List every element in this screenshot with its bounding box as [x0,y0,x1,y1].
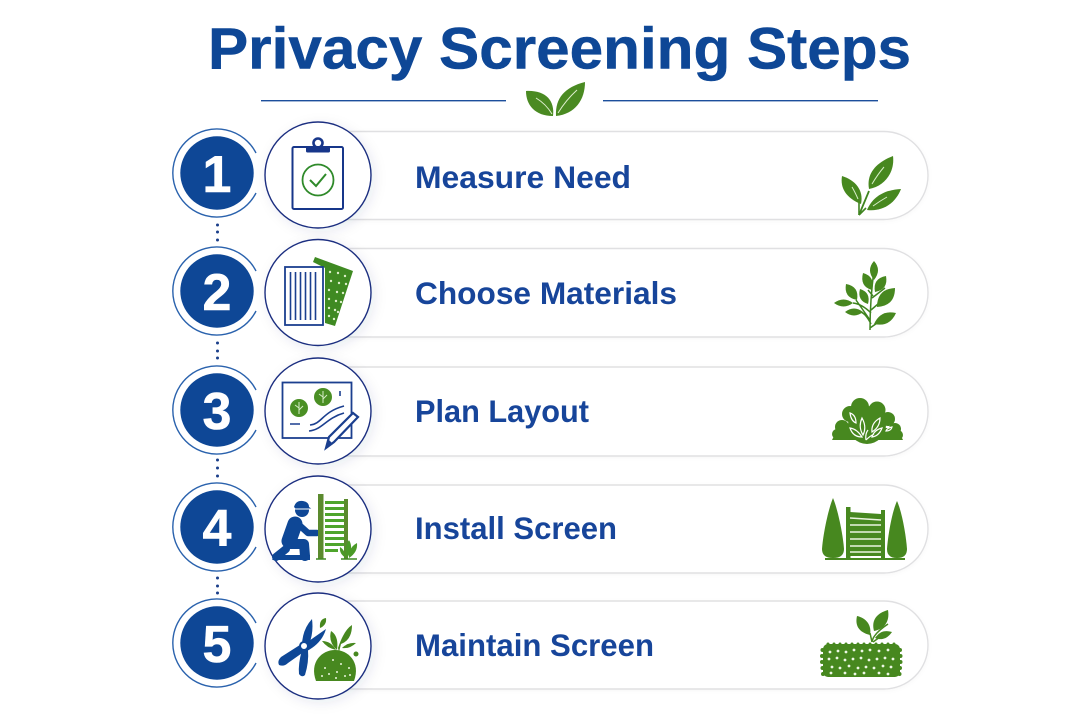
step 4 icon: fence between trees [822,498,907,560]
step 3: plan layout [173,358,928,464]
connector dots [216,224,219,594]
title: Privacy Screening Steps [208,16,911,82]
step 1 icon: clipboard with check [265,122,371,228]
step 5 number badge [173,599,256,687]
step 1 number badge: 1 [203,146,231,204]
step 2 number badge: 2 [203,264,231,322]
step 4: install screen [173,476,928,582]
step 4 number badge [173,483,256,571]
step 5 icon: hedge with sprout [820,610,902,677]
step 2 icon: leafy sprig [834,261,896,330]
step 4 number badge: 4 [203,500,232,558]
step 2: choose materials [173,240,928,346]
step 1 number badge [173,129,256,217]
step 1 icon: three leaves [842,156,901,215]
step 4 icon: worker installing fence [265,476,371,582]
step 3 icon: layout plan with pencil [265,358,371,464]
step 5 label: Maintain Screen [415,627,654,663]
step 1 pill [300,132,928,220]
step 5 number badge: 5 [203,616,231,674]
step 5: maintain screen [173,593,928,699]
step 2 icon: material swatches [265,240,371,346]
step 5 pill [300,601,928,689]
step 1: measure need [173,122,928,228]
step 2 pill [300,248,928,337]
step 3 pill [300,367,928,456]
step 3 label: Plan Layout [415,393,589,429]
step 3 icon: shrub [832,398,903,444]
step 5 icon: pruners and bush [265,593,371,699]
step 3 number badge [173,366,256,454]
step 2 label: Choose Materials [415,275,677,311]
step 4 label: Install Screen [415,510,617,546]
step 4 pill [300,485,928,573]
step 3 number badge: 3 [203,383,231,441]
step 2 number badge [173,247,256,335]
step 1 label: Measure Need [415,159,631,195]
title divider with leaves [261,82,878,116]
